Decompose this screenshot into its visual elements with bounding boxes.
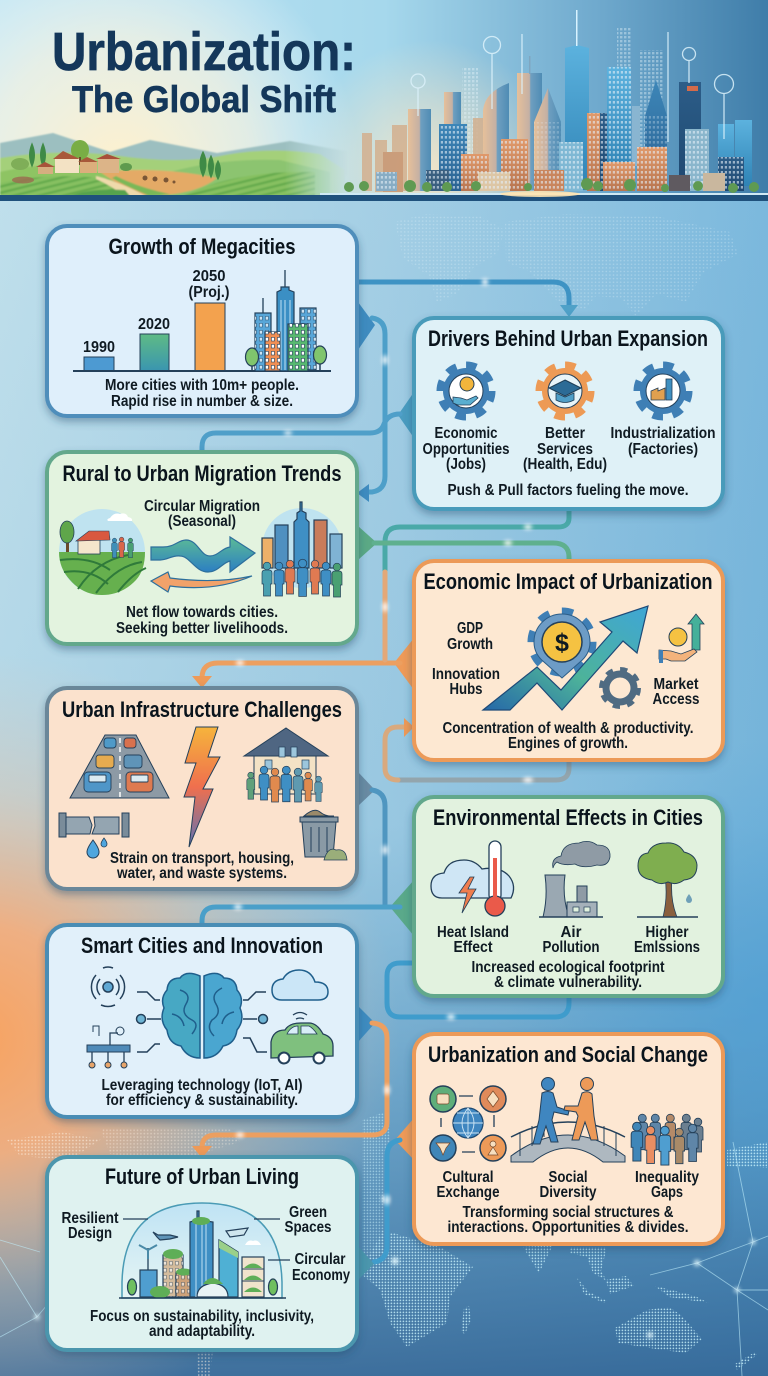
text: smart cities summary: Leveraging technology (IoT, AI) bbox=[102, 1077, 302, 1094]
label: industrialization: Industrialization bbox=[610, 425, 716, 442]
label: better services bbox=[523, 425, 607, 473]
icon: city skyline bbox=[246, 270, 326, 371]
bar chart: number of megacities: 2050 bbox=[192, 268, 226, 285]
text: infrastructure summary: water, and waste systems. bbox=[116, 865, 287, 882]
connector: megacities to drivers bbox=[357, 282, 578, 317]
panel: rural to urban migration bbox=[47, 452, 357, 644]
text: migration summary: Seeking better livelihoods. bbox=[116, 620, 288, 637]
faint background towers bbox=[462, 28, 664, 168]
text: social change summary: Transforming social structures & bbox=[462, 1204, 674, 1221]
panel: urbanization and social change bbox=[414, 1034, 723, 1244]
title: The Global Shift bbox=[72, 79, 336, 120]
icon: rural scene bbox=[59, 509, 146, 595]
farmhouses and trees bbox=[11, 140, 220, 184]
icon: cultural exchange bbox=[430, 1086, 506, 1161]
labels: environmental effects: Effect bbox=[454, 939, 493, 956]
text: smart cities summary: for efficiency & sustainability. bbox=[106, 1092, 298, 1109]
icon: bridge handshake bbox=[511, 1078, 625, 1162]
icon: heat island bbox=[431, 841, 514, 916]
text: megacities summary: Rapid rise in number & size. bbox=[111, 393, 293, 410]
text: future summary: Focus on sustainability, inclusivity, bbox=[90, 1308, 314, 1325]
panel: environmental effects bbox=[414, 797, 723, 996]
icon: leaking pipe bbox=[59, 813, 129, 858]
heading: rural to urban: Rural to Urban Migration Trends bbox=[62, 461, 342, 486]
ground band bbox=[0, 191, 768, 201]
label: market access: Access bbox=[652, 691, 700, 708]
icon: tree emissions bbox=[637, 843, 698, 917]
labels: social change: Gaps bbox=[651, 1184, 683, 1201]
label: economic opportunities: Opportunities bbox=[422, 441, 510, 458]
world map top bbox=[395, 214, 738, 316]
label: economic opportunities: Economic bbox=[434, 425, 498, 442]
world map bottom with network bbox=[0, 1110, 768, 1376]
panel: urban infrastructure challenges bbox=[47, 688, 357, 889]
connector: drivers to economic impact bbox=[385, 510, 569, 570]
icon: better services gear bbox=[539, 365, 591, 417]
label: market access bbox=[652, 676, 700, 708]
connector: social change to future bbox=[358, 1118, 414, 1280]
label: industrialization: (Factories) bbox=[628, 441, 698, 458]
text: smart cities summary bbox=[102, 1077, 302, 1109]
heading: social change: Urbanization and Social Change bbox=[428, 1042, 708, 1067]
labels: social change: Exchange bbox=[436, 1184, 500, 1201]
callout: green spaces: Spaces bbox=[284, 1219, 332, 1236]
text: future summary bbox=[90, 1308, 314, 1340]
label: economic opportunities: (Jobs) bbox=[446, 456, 486, 473]
icon: wireless signal bbox=[91, 967, 125, 1006]
labels: social change: Social bbox=[548, 1169, 588, 1186]
text: megacities summary: More cities with 10m+ people. bbox=[105, 377, 299, 394]
floating icons bbox=[411, 32, 734, 142]
text: circular migration: Circular Migration bbox=[144, 498, 260, 515]
title bbox=[52, 22, 356, 120]
icon: cloud bbox=[272, 970, 328, 1000]
bar chart: number of megacities: (Proj.) bbox=[188, 284, 230, 301]
title: Urbanization: bbox=[52, 22, 356, 82]
labels: environmental effects: Air bbox=[560, 924, 582, 941]
panel: drivers behind urban expansion bbox=[414, 318, 723, 509]
icon: inequality group bbox=[631, 1114, 703, 1165]
heading: environmental effects: Environmental Effects in Cities bbox=[433, 805, 703, 830]
text: future summary: and adaptability. bbox=[149, 1323, 255, 1340]
icon: economic opportunities gear bbox=[440, 365, 492, 417]
text: megacities summary bbox=[105, 377, 299, 410]
icon: congested road bbox=[70, 735, 169, 798]
label: better services: Services bbox=[537, 441, 593, 458]
text: drivers summary: Push & Pull factors fueling the move. bbox=[448, 482, 688, 499]
text: migration summary bbox=[116, 604, 288, 637]
connector: rural migration to economic impact bbox=[358, 526, 569, 561]
labels: gdp and innovation bbox=[432, 620, 500, 698]
text: social change summary bbox=[448, 1204, 688, 1236]
callout: circular economy: Circular bbox=[294, 1251, 346, 1268]
labels: gdp and innovation: Innovation bbox=[432, 666, 500, 683]
icon: crowded housing bbox=[244, 728, 328, 802]
icon: wavy arrow to city bbox=[151, 537, 255, 572]
text: environmental summary: Increased ecological footprint bbox=[472, 959, 665, 976]
text: economic summary: Concentration of wealth & productivity. bbox=[442, 720, 694, 737]
icon: circuit lines bbox=[136, 992, 268, 1052]
callout: resilient design: Resilient bbox=[62, 1210, 119, 1227]
panel: growth of megacities bbox=[47, 226, 357, 416]
icon: industrialization gear bbox=[637, 365, 689, 417]
heading: growth of megacities: Growth of Megacities bbox=[108, 234, 296, 259]
icon: dollar gear bbox=[532, 612, 592, 678]
icon: overflowing trash can bbox=[300, 810, 347, 860]
connector: infrastructure to environment and economy bbox=[358, 718, 569, 905]
label: industrialization bbox=[610, 425, 716, 458]
label: better services: (Health, Edu) bbox=[523, 456, 607, 473]
panel: future of urban living bbox=[47, 1157, 357, 1350]
icon: air pollution bbox=[539, 841, 610, 917]
label: better services: Better bbox=[545, 425, 585, 442]
labels: gdp and innovation: Hubs bbox=[450, 681, 483, 698]
text: economic summary: Engines of growth. bbox=[508, 735, 628, 752]
text: environmental summary: & climate vulnerability. bbox=[494, 974, 642, 991]
label: economic opportunities bbox=[422, 425, 510, 473]
labels: environmental effects: Emlssions bbox=[634, 939, 700, 956]
icon: domed green city bbox=[119, 1203, 286, 1298]
text: infrastructure summary: Strain on transport, housing, bbox=[110, 850, 294, 867]
connector: economic impact to infrastructure bbox=[192, 572, 414, 690]
connector: environment to smart cities bbox=[202, 880, 414, 936]
heading: smart cities: Smart Cities and Innovation bbox=[81, 933, 323, 958]
text: circular migration bbox=[144, 498, 260, 530]
text: infrastructure summary bbox=[110, 850, 294, 882]
icon: growth arrow bbox=[483, 606, 648, 710]
icon: connected car bbox=[271, 1012, 333, 1064]
connector: drivers to rural migration bbox=[202, 392, 414, 452]
callout: green spaces: Green bbox=[289, 1204, 327, 1221]
callout: green spaces bbox=[254, 1204, 332, 1236]
text: circular migration: (Seasonal) bbox=[168, 513, 236, 530]
panel: smart cities and innovation bbox=[47, 925, 357, 1117]
labels: social change: Inequality bbox=[635, 1169, 699, 1186]
icon: network hub bbox=[87, 1026, 130, 1068]
callout: circular economy: Economy bbox=[292, 1267, 350, 1284]
bar chart: number of megacities: 1990 bbox=[83, 339, 115, 356]
callout: circular economy bbox=[268, 1251, 350, 1284]
icon: hand with coin bbox=[659, 614, 704, 663]
hills bbox=[0, 133, 350, 196]
labels: gdp and innovation: Growth bbox=[447, 636, 493, 653]
heading: infrastructure: Urban Infrastructure Challenges bbox=[62, 697, 342, 722]
bar chart: number of megacities bbox=[73, 268, 331, 371]
labels: social change: Diversity bbox=[540, 1184, 597, 1201]
panel: economic impact bbox=[414, 561, 723, 760]
labels: gdp and innovation: GDP bbox=[457, 620, 483, 637]
icon: dollar gear: $ bbox=[555, 629, 569, 657]
labels: social change bbox=[436, 1169, 699, 1201]
icon: city with crowd bbox=[262, 502, 342, 597]
labels: social change: Cultural bbox=[442, 1169, 494, 1186]
labels: environmental effects: Pollution bbox=[542, 939, 600, 956]
heading: future: Future of Urban Living bbox=[105, 1164, 299, 1189]
bar chart: number of megacities: 2020 bbox=[138, 316, 170, 333]
icon: orange return arrow bbox=[151, 572, 252, 592]
label: market access: Market bbox=[654, 676, 699, 693]
callout: resilient design bbox=[62, 1210, 148, 1242]
city skyline bbox=[344, 10, 759, 193]
header banner bbox=[0, 0, 768, 201]
text: social change summary: interactions. Opportunities & divides. bbox=[448, 1219, 688, 1236]
text: environmental summary bbox=[472, 959, 665, 991]
callout: resilient design: Design bbox=[68, 1225, 112, 1242]
icon: lightning bolt bbox=[184, 727, 220, 847]
text: migration summary: Net flow towards cities. bbox=[126, 604, 278, 621]
connector: megacities to rural migration bbox=[357, 302, 385, 502]
labels: environmental effects: Heat Island bbox=[437, 924, 509, 941]
text: economic summary bbox=[442, 720, 694, 752]
labels: environmental effects bbox=[437, 924, 700, 956]
icon: brain bbox=[162, 973, 242, 1058]
labels: environmental effects: Higher bbox=[646, 924, 688, 941]
connector highlights bbox=[234, 278, 533, 1205]
icon: small gear bbox=[602, 670, 638, 706]
connector: environment loop bbox=[387, 963, 569, 1017]
connector: smart cities to future bbox=[192, 1006, 387, 1158]
